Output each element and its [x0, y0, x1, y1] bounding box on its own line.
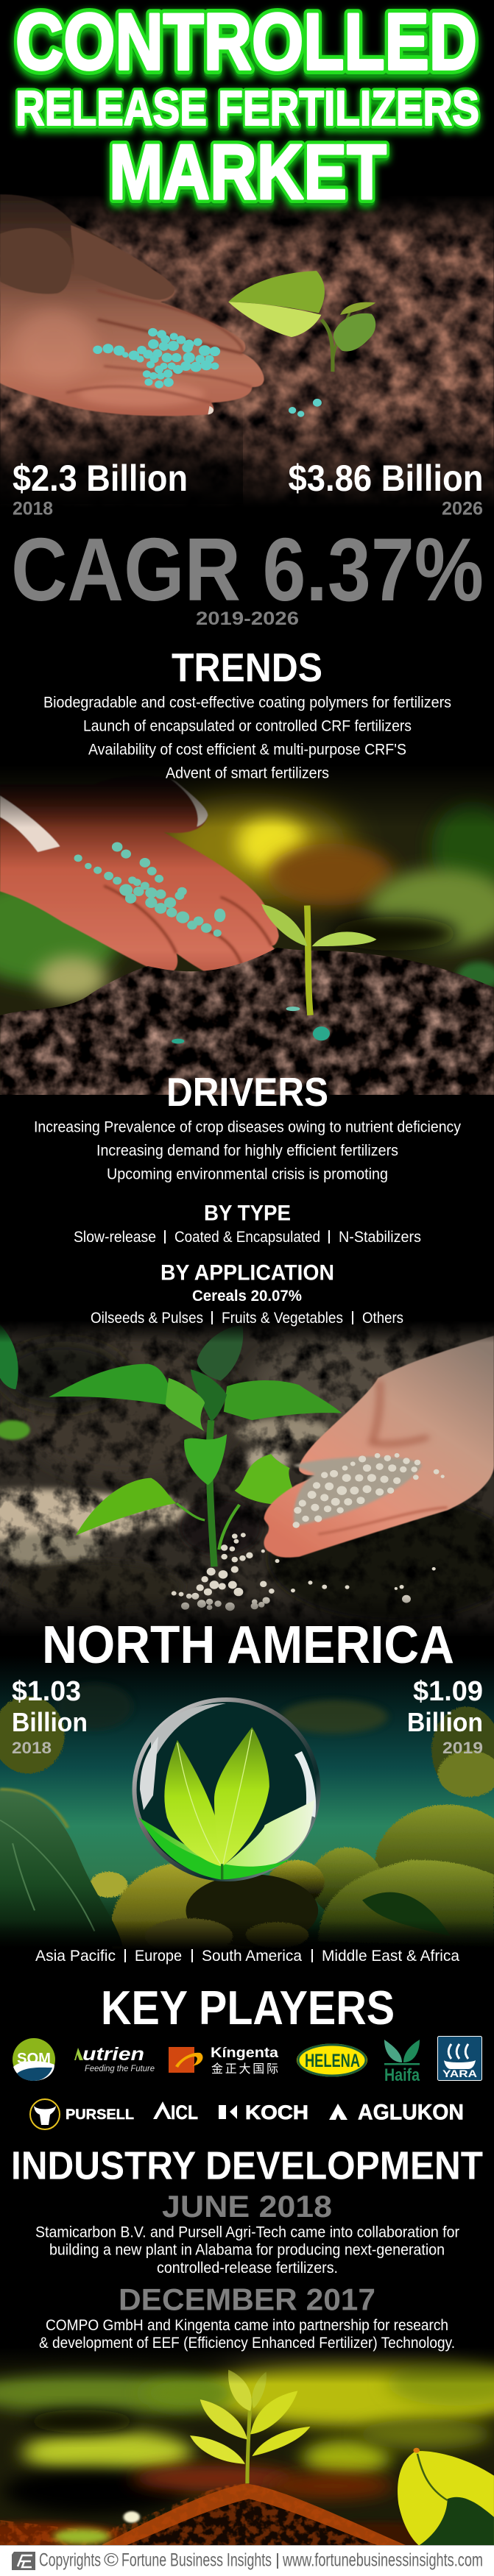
text block: application segments: Others — [362, 1309, 403, 1327]
text block: trends list: Availability of cost efficient & multi-purpose CRF'S — [88, 741, 406, 759]
text block: application segments: Oilseeds & Pulses — [91, 1309, 203, 1327]
text block: june 2018 development: controlled-release fertilizers. — [157, 2259, 338, 2277]
text block: trends list — [43, 694, 451, 782]
photo: hand dropping granules beside sprout — [0, 764, 494, 1096]
heading: drivers: DRIVERS — [166, 1069, 328, 1115]
logo: Haifa: Haifa — [384, 2065, 420, 2085]
logo: Helena — [297, 2044, 367, 2076]
text block: december 2017 development — [39, 2316, 455, 2352]
title line: market: MARKET — [109, 129, 387, 216]
stat: north america 2018: $1.03 — [12, 1676, 81, 1707]
stat: north america 2018: Billion — [12, 1707, 88, 1737]
stat: 2018 market value — [13, 458, 188, 519]
heading: june 2018: JUNE 2018 — [162, 2189, 332, 2224]
heading: trends: TRENDS — [172, 645, 322, 690]
logo: Pursell — [30, 2099, 134, 2129]
text: copyright line — [39, 2550, 483, 2571]
stat: north america 2018 — [12, 1676, 88, 1757]
text block: drivers list: Increasing demand for highly efficient fertilizers — [96, 1142, 398, 1160]
logo: Haifa — [384, 2040, 420, 2085]
photo: hand with blue granules and seedling in soil — [0, 191, 494, 515]
text block: december 2017 development: COMPO GmbH and Kingenta came into partnership for research — [46, 2316, 448, 2334]
logo: Yara — [437, 2037, 481, 2081]
heading: by application: BY APPLICATION — [160, 1261, 334, 1285]
text block: type segments — [74, 1228, 421, 1246]
icon: Fortune Business Insights logo — [12, 2552, 35, 2570]
text block: other regions: Middle East & Africa — [322, 1947, 459, 1965]
heading: by type: BY TYPE — [204, 1201, 291, 1226]
heading: north america: NORTH AMERICA — [42, 1616, 454, 1675]
stat: north america 2019: $1.09 — [413, 1676, 483, 1707]
logo: Nutrien: utrien — [82, 2044, 144, 2065]
logo: Kingenta: 金正大国际 — [211, 2059, 278, 2076]
stat: CAGR: 2019-2026 — [196, 608, 299, 629]
stat: 2026 market value — [289, 458, 483, 519]
heading: key players: KEY PLAYERS — [101, 1981, 395, 2034]
logo: SQM — [13, 2038, 55, 2081]
text block: other regions — [35, 1947, 459, 1965]
text block: application segments: Fruits & Vegetables — [222, 1309, 343, 1327]
logo: Kingenta — [169, 2045, 278, 2076]
logo: Koch — [219, 2101, 308, 2123]
text block: trends list: Advent of smart fertilizers — [166, 764, 329, 782]
logo: ICL: ICL — [171, 2101, 198, 2123]
title — [15, 0, 479, 216]
stat: north america 2019: Billion — [407, 1707, 483, 1737]
text block: june 2018 development — [35, 2224, 459, 2277]
text: copyright line: © — [104, 2550, 119, 2571]
text block: june 2018 development: building a new plant in Alabama for producing next-generation — [49, 2241, 445, 2259]
text block: drivers list: Increasing Prevalence of crop diseases owing to nutrient deficiency — [34, 1118, 461, 1136]
text block: other regions: Asia Pacific — [35, 1947, 116, 1965]
logo: Nutrien — [74, 2044, 155, 2073]
photo: glowing seedling in soil — [0, 2349, 494, 2545]
text block: type segments: N-Stabilizers — [339, 1228, 421, 1246]
stat: north america 2019 — [407, 1676, 483, 1757]
text block: trends list: Biodegradable and cost-effective coating polymers for fertilizers — [43, 694, 451, 712]
logo: Koch: KOCH — [245, 2101, 308, 2123]
logo: Helena: HELENA — [305, 2051, 360, 2071]
text block: other regions: Europe — [135, 1947, 182, 1965]
logo: Aglukon: AGLUKON — [358, 2100, 464, 2125]
photo: leaf in droplet on moss — [0, 1667, 494, 1947]
footer — [0, 2545, 494, 2576]
logo: Pursell: PURSELL — [66, 2107, 134, 2123]
photo: pepper seedling and hand with white fertilizer pellets — [0, 1324, 494, 1630]
text block: type segments: Slow-release — [74, 1228, 156, 1246]
text: cereals share: Cereals 20.07% — [192, 1287, 302, 1305]
logo: ICL — [153, 2101, 198, 2123]
logo: Kingenta: Kíngenta — [211, 2045, 278, 2061]
text block: drivers list: Upcoming environmental crisis is promoting — [107, 1165, 388, 1183]
stat: north america 2019: 2019 — [442, 1739, 483, 1757]
text block: other regions: South America — [202, 1947, 302, 1965]
stat: 2018 market value: $2.3 Billion — [13, 458, 188, 499]
text block: type segments: Coated & Encapsulated — [174, 1228, 320, 1246]
logo: Yara: YARA — [442, 2068, 477, 2079]
logo: Nutrien: Feeding the Future — [85, 2063, 155, 2073]
text: copyright line: Copyrights — [39, 2550, 101, 2571]
icon: glass droplet with leaves — [134, 1700, 318, 1879]
text block: application segments — [91, 1309, 403, 1327]
logo: SQM: SQM — [17, 2051, 51, 2067]
text block: december 2017 development: & development of EEF (Efficiency Enhanced Fertilizer) Technology. — [39, 2334, 455, 2352]
stat: 2026 market value: 2026 — [442, 499, 483, 519]
text block: drivers list — [34, 1118, 461, 1183]
stat: 2018 market value: 2018 — [13, 499, 53, 519]
text: copyright line: Fortune Business Insights — [121, 2550, 272, 2571]
text block: june 2018 development: Stamicarbon B.V. and Pursell Agri-Tech came into collaboration for — [35, 2224, 459, 2241]
heading: december 2017: DECEMBER 2017 — [119, 2282, 375, 2317]
title line: market: MARKET — [109, 129, 387, 216]
stat: north america 2018: 2018 — [12, 1739, 52, 1757]
text block: trends list: Launch of encapsulated or controlled CRF fertilizers — [83, 717, 412, 734]
